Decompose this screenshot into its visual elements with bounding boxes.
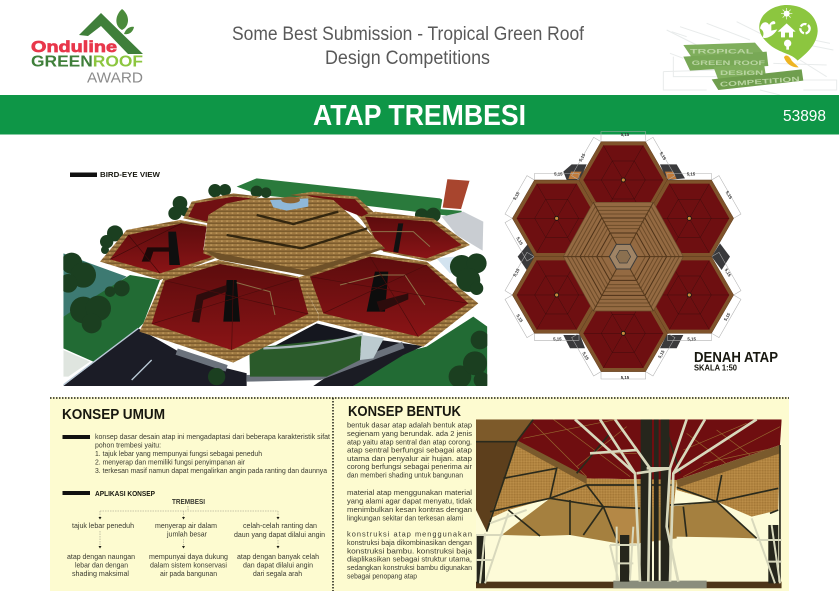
- left garden: [63, 253, 247, 386]
- tree row two: air pada bangunan: [160, 569, 217, 578]
- subtitle: [232, 24, 585, 69]
- roof plan: [505, 132, 741, 380]
- panel: konsep bentuk: [347, 403, 473, 580]
- logo wordmark: GREEN ROOF: [31, 54, 143, 70]
- subtitle: Some Best Submission - Tropical Green Roof: [232, 24, 585, 45]
- ghost lettering: [663, 22, 837, 95]
- text block: basic form: dan memberi shading untuk bangunan: [347, 470, 463, 480]
- back wings: [183, 192, 375, 223]
- dimension labels: 5,15: [621, 375, 630, 380]
- roof wings: [512, 142, 734, 372]
- dimension labels: 5,15: [581, 351, 590, 361]
- text block: construction: sedangkan konstruksi bambu digunakan: [347, 563, 472, 572]
- dimension labels: 5,15: [687, 172, 696, 177]
- green block lettering: GREEN ROOF: [692, 60, 765, 67]
- tree row two: atap dengan banyak celah: [237, 552, 319, 561]
- dimension labels: 5,15: [659, 151, 668, 161]
- text block: basic form: corong berfungsi sebagai penerima air: [347, 462, 473, 471]
- header bar: [0, 95, 839, 134]
- tree row one: daun yang dapat dilalui angin: [234, 530, 325, 539]
- dark corner blocks: [518, 164, 730, 348]
- wing: right: [362, 212, 470, 262]
- wing: front left: [139, 260, 318, 363]
- text block: basic form: [347, 421, 473, 480]
- render: interior structure: [476, 419, 782, 588]
- subtitle: Design Competitions: [325, 48, 490, 69]
- label: bird-eye view: [70, 170, 161, 179]
- text block: basic form: utama dan penyalur air hujan. atap: [347, 454, 472, 463]
- heading: denah atap: [694, 350, 778, 372]
- tree row two: mempunyai daya dukung: [149, 552, 228, 561]
- text block: construction: diaplikasikan sebagai struktur utama,: [347, 555, 472, 564]
- dimension labels: 5,15: [621, 132, 630, 137]
- skylight: [270, 198, 308, 211]
- green block lettering: [683, 43, 803, 90]
- tree row one: celah-celah ranting dan: [243, 521, 317, 530]
- wing: left: [100, 220, 215, 280]
- speech bubble: [759, 5, 818, 61]
- central dark columns: [477, 419, 778, 583]
- dimension labels: 5,15: [515, 313, 524, 324]
- dimension labels: 5,15: [578, 152, 587, 162]
- text block: basic form: segienam yang berundak. ada 2 jenis: [347, 429, 472, 438]
- text block: material: lingkungan sekitar dan terkesan alami: [347, 513, 463, 522]
- dimension labels: 5,15: [724, 268, 733, 278]
- tree row two: dan dapat dilalui angin: [243, 560, 313, 570]
- label: bird-eye view: BIRD-EYE VIEW: [100, 170, 161, 179]
- trees: [59, 184, 490, 388]
- central hexagon roof: [563, 202, 683, 311]
- text block: concept intro: 2. menyerap dan memiliki fungsi penyimpanan air: [95, 458, 245, 466]
- dimension lines: [505, 132, 741, 379]
- tree row two: lebar dan dengan: [75, 560, 128, 570]
- dimension labels: 5,15: [554, 172, 563, 177]
- red roof underside: [517, 419, 782, 480]
- subheading: aplikasi konsep: APLIKASI KONSEP: [95, 491, 155, 498]
- connectors: [100, 506, 278, 546]
- dimension labels: 5,15: [553, 336, 562, 341]
- tree row two: [67, 552, 319, 578]
- central roof: [203, 197, 385, 276]
- text block: construction: [347, 530, 473, 580]
- logo: tropical green roof design competition: [663, 5, 837, 95]
- tree row one: jumlah besar: [166, 530, 208, 538]
- text block: basic form: atap sentral berfungsi sebagai atap: [347, 446, 472, 455]
- green block lettering: DESIGN: [720, 70, 764, 77]
- text block: basic form: bentuk dasar atap adalah bentuk atap: [347, 421, 472, 430]
- dimension labels: 5,15: [512, 267, 521, 277]
- tree row two: dalam sistem konservasi: [150, 560, 227, 570]
- icons in bubble: [760, 8, 810, 50]
- render: bird-eye view of roof: [59, 178, 490, 388]
- text block: material: material atap menggunakan material: [347, 488, 472, 497]
- text block: material: [347, 488, 472, 522]
- green block lettering: TROPICAL: [690, 48, 753, 55]
- title: ATAP TREMBESI: [313, 100, 526, 132]
- diagram: concept application tree: TREMBESI: [172, 497, 205, 506]
- text block: construction: konstruksi baja dikombinasikan dengan: [347, 538, 472, 547]
- logo: Onduline Green Roof Award: [31, 9, 143, 86]
- heading: denah atap: SKALA 1:50: [694, 362, 737, 372]
- text block: construction: sebagai penopang atap: [347, 572, 417, 580]
- text block: concept intro: 3. terkesan masif namun dapat mengalirkan angin pada ranting dan daunnya: [95, 466, 328, 475]
- icon: orange bird: [784, 56, 799, 67]
- green block lettering: COMPETITION: [720, 76, 800, 89]
- submission number: 53898: [783, 108, 826, 125]
- panel: concept background: [50, 397, 789, 591]
- panel: konsep umum: [62, 407, 330, 578]
- dimension labels: [512, 132, 734, 380]
- dimension labels: 5,15: [515, 236, 524, 246]
- text block: material: menimbulkan kesan kontras dengan: [347, 505, 472, 514]
- wing: front right: [298, 253, 478, 347]
- text block: concept intro: [62, 432, 330, 475]
- floor: [476, 581, 782, 588]
- green wall: [249, 323, 384, 377]
- subheading: aplikasi konsep: [62, 491, 155, 498]
- tree row one: [72, 521, 325, 539]
- timber ceiling: [476, 419, 780, 543]
- award label: AWARD: [87, 70, 143, 86]
- text block: concept intro: pohon trembesi yaitu:: [95, 440, 161, 450]
- dimension labels: 5,15: [687, 336, 696, 341]
- text block: concept intro: konsep dasar desain atap ini mengadaptasi dari beberapa karakteristik sifat: [95, 432, 330, 441]
- heading: KONSEP BENTUK: [348, 403, 461, 420]
- tree row one: menyerap air dalam: [155, 521, 217, 530]
- heading: denah atap: DENAH ATAP: [694, 350, 778, 366]
- diagram: concept application tree: [67, 497, 325, 578]
- text block: construction: konstruksi bambu. konstruksi baja: [347, 546, 473, 555]
- dimension labels: 5,15: [657, 349, 666, 359]
- text block: construction: konstruksi atap menggunakan: [347, 530, 472, 539]
- text block: concept intro: 1. tajuk lebar yang mempunyai fungsi sebagai peneduh: [95, 449, 262, 458]
- text block: basic form: atap yaitu atap sentral dan atap corong.: [347, 437, 472, 446]
- tree row two: atap dengan naungan: [67, 552, 135, 561]
- text block: material: yang alami agar dapat menyatu, tidak: [347, 496, 472, 506]
- white steel side frames: [476, 510, 782, 583]
- icon: leaves: [116, 9, 134, 34]
- dimension labels: 5,15: [512, 191, 521, 201]
- brand name: Onduline: [31, 39, 117, 56]
- dimension labels: 5,15: [723, 311, 732, 322]
- dimension labels: 5,15: [725, 190, 734, 200]
- tree row one: tajuk lebar peneduh: [72, 521, 134, 530]
- tree row two: dari segala arah: [253, 569, 302, 578]
- right garden: [177, 317, 487, 386]
- back lawn and building: [237, 178, 483, 273]
- tree row two: shading maksimal: [72, 569, 129, 578]
- white steel branches: [575, 419, 757, 582]
- icon: house roof: [79, 13, 143, 54]
- dark beams: [476, 419, 780, 583]
- heading: KONSEP UMUM: [62, 407, 165, 423]
